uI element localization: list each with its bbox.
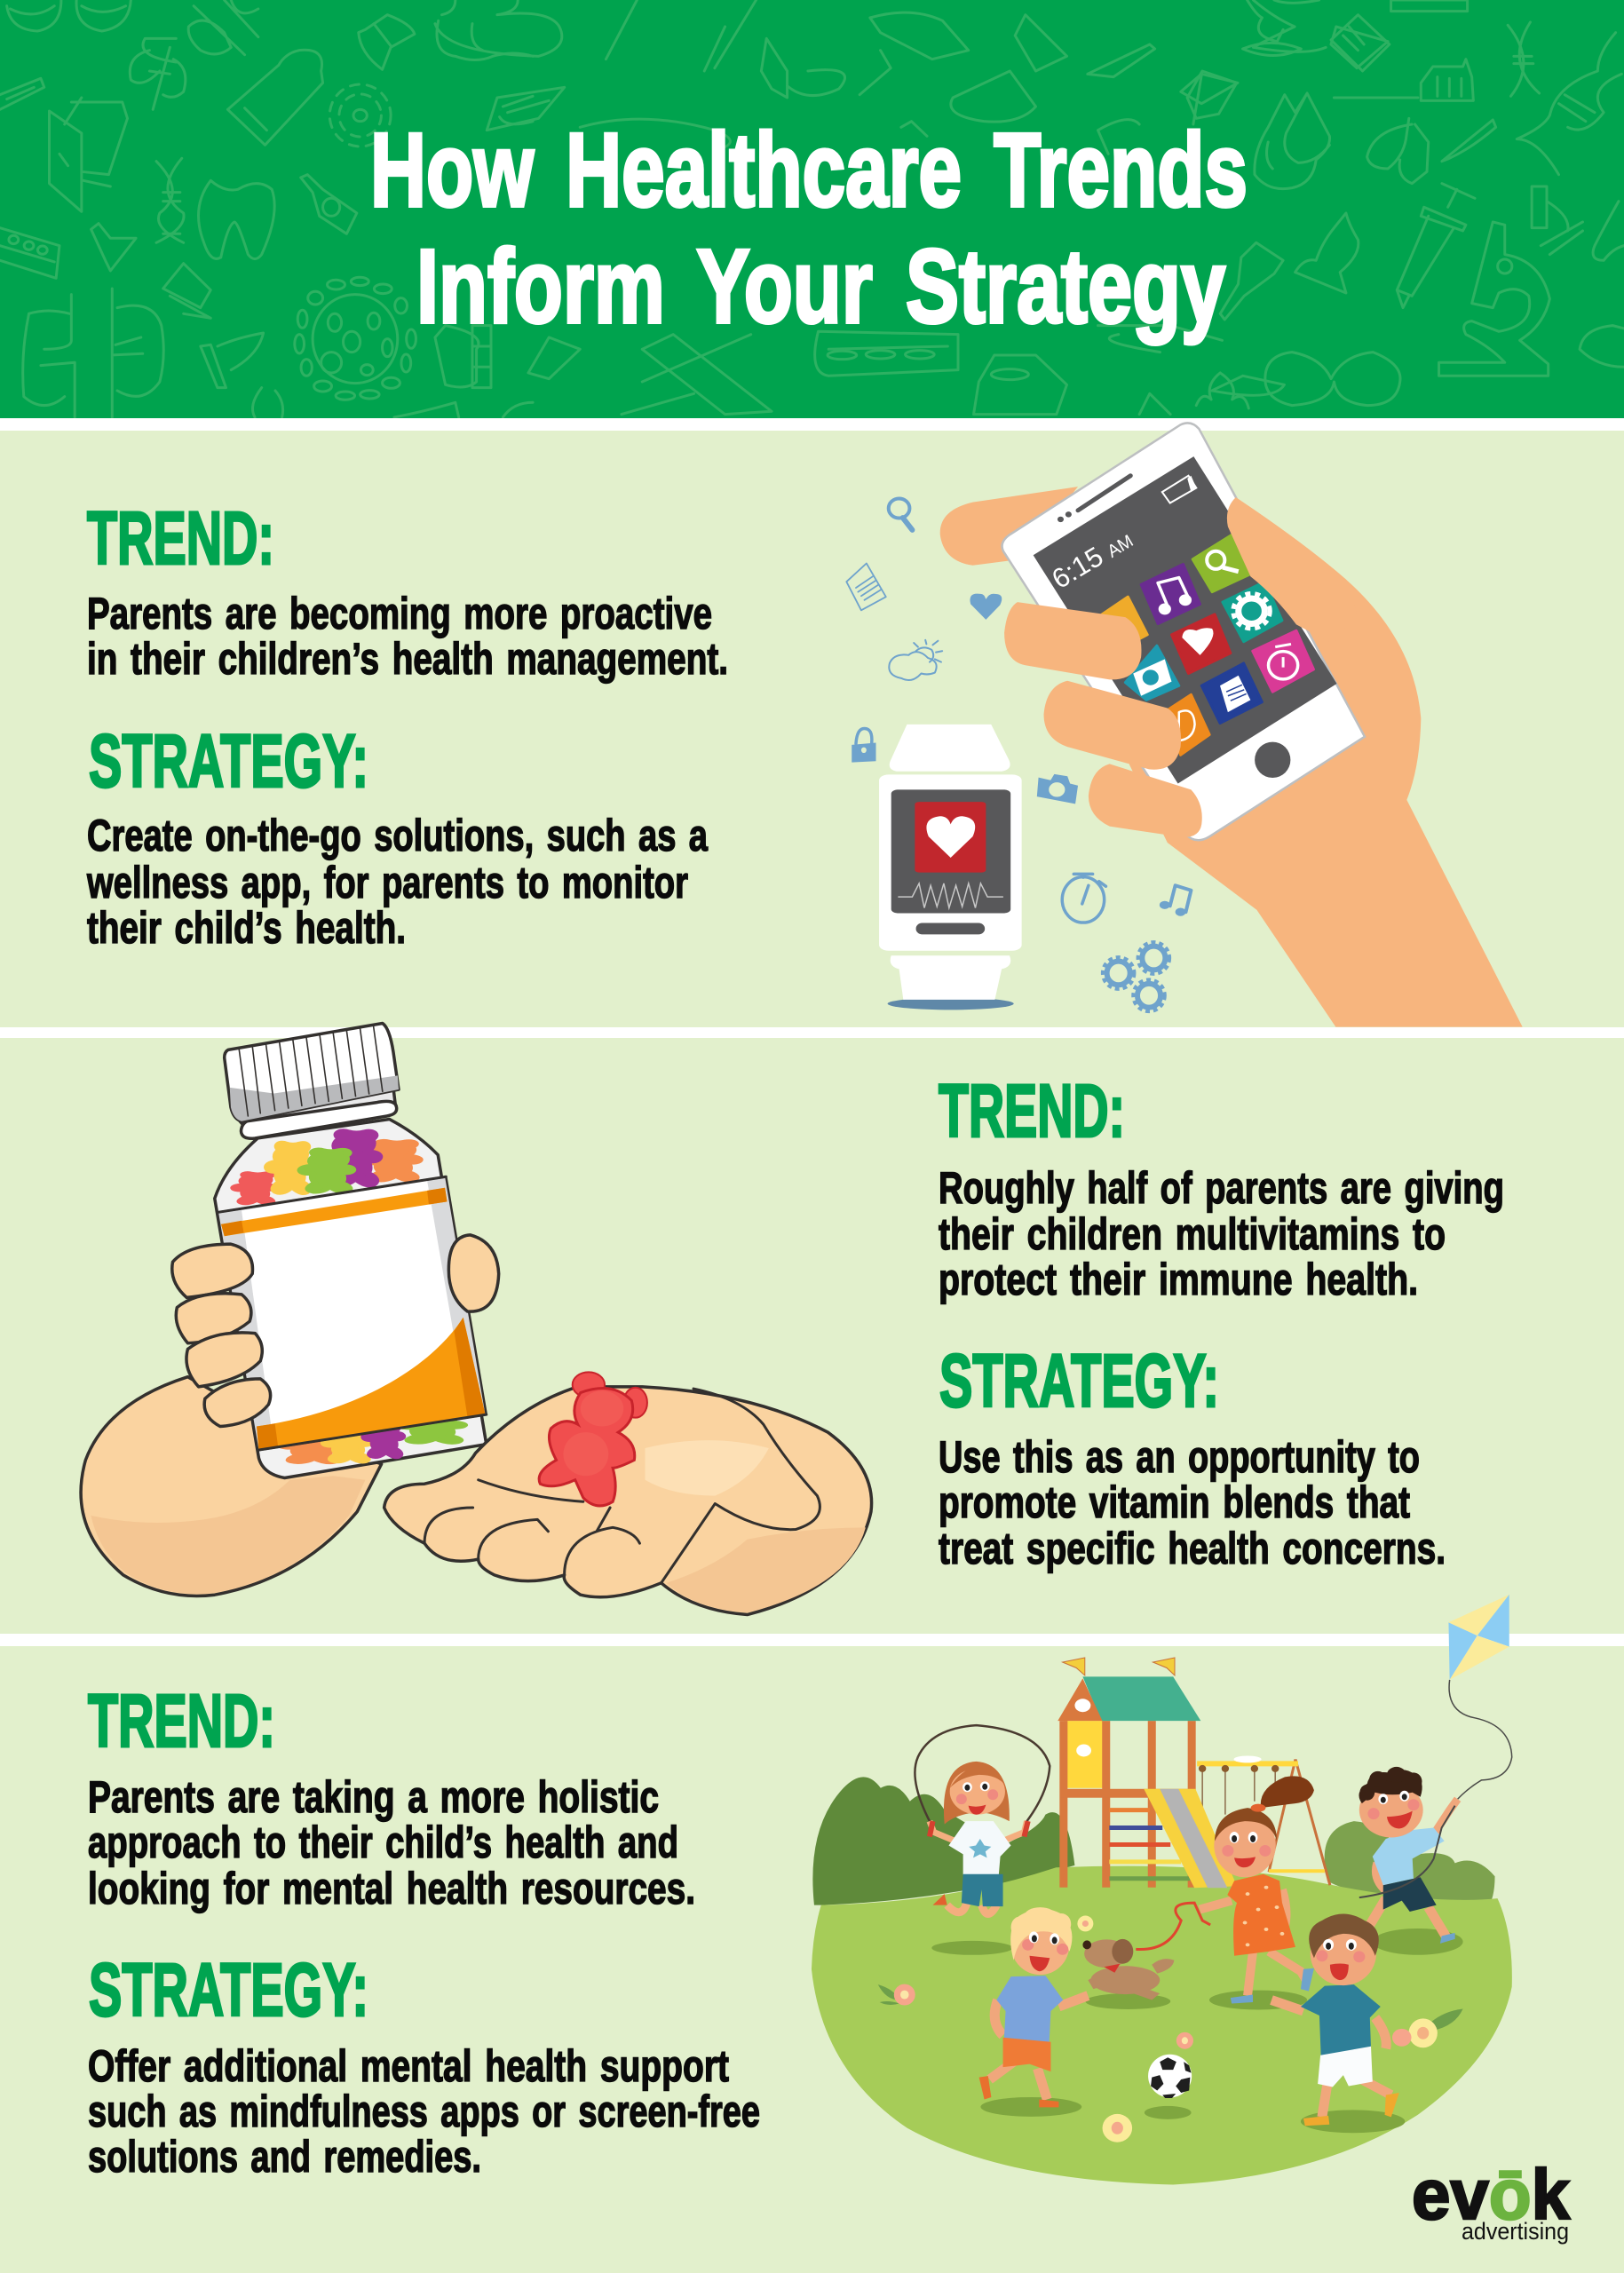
child: blond boy — [979, 1907, 1088, 2107]
floating blue app icons — [846, 498, 1191, 1011]
gummy bears in jar — [233, 1131, 463, 1463]
heading: strategy 2: STRATEGY: — [939, 1339, 1219, 1422]
child: girl in orange dress — [1200, 1776, 1314, 2004]
text: strategy 3 body: Offer additional mental health support — [88, 2041, 729, 2091]
dog with leash — [1082, 1903, 1210, 2000]
slide — [1144, 1789, 1237, 1888]
logo: evok advertising: evōk — [1412, 2155, 1570, 2234]
flowers — [878, 1916, 1463, 2142]
illustration: smartwatch — [879, 725, 1022, 1010]
icon: stopwatch — [1062, 874, 1105, 923]
text: trend 3 body: looking for mental health resources. — [88, 1864, 695, 1913]
panel: trend 3 text — [88, 1679, 760, 2182]
icon: gears — [1103, 942, 1169, 1011]
grass — [812, 1866, 1512, 2184]
panel: trend 1 text — [86, 496, 728, 953]
panel: trend 2 text — [939, 1069, 1504, 1573]
child: girl with jump rope — [915, 1725, 1050, 1914]
text: strategy 2 body: Use this as an opportunity to — [939, 1432, 1420, 1482]
title — [370, 112, 1248, 345]
text: trend 3 body: approach to their child’s health and — [88, 1818, 678, 1867]
header banner — [0, 0, 1624, 418]
text: trend 2 body: protect their immune health. — [939, 1255, 1418, 1304]
text: trend 3 body: Parents are taking a more holistic — [88, 1772, 659, 1822]
heading: strategy 1: STRATEGY: — [89, 719, 368, 803]
phone screen — [1034, 456, 1337, 783]
illustration: vitamin bottle and hands — [81, 1023, 872, 1615]
swing set — [1197, 1755, 1330, 1885]
watch heart — [926, 816, 975, 858]
icon: camera — [1037, 774, 1078, 804]
phone clock text: 6:15 AM — [1047, 523, 1137, 595]
child: boy in teal shirt — [1271, 1914, 1399, 2126]
phone speaker and battery — [1058, 476, 1196, 522]
icon: magnifier — [889, 498, 912, 530]
header pattern: left medical icons — [0, 0, 533, 417]
bottle neck ring — [241, 1101, 397, 1138]
icon: music note — [1160, 885, 1191, 916]
icon: document — [846, 563, 886, 610]
title: How Healthcare Trends — [370, 112, 1248, 229]
thumb over phone — [1227, 497, 1357, 644]
text: strategy 1 body — [86, 811, 709, 953]
home button — [1255, 742, 1290, 778]
text: trend 1 body — [87, 589, 728, 684]
bottle label — [218, 1176, 487, 1450]
text: strategy 3 body — [88, 2041, 760, 2182]
gummy bear on palm — [539, 1372, 647, 1506]
text: strategy 1 body: wellness app, for parents to monitor — [86, 858, 688, 907]
roof — [1082, 1676, 1200, 1721]
text: trend 2 body — [939, 1163, 1504, 1304]
text: strategy 1 body: Create on-the-go solutions, such as a — [87, 811, 709, 860]
text: strategy 1 body: their child’s health. — [87, 903, 406, 953]
text: strategy 3 body: such as mindfulness apps or screen-free — [88, 2087, 760, 2136]
text: trend 1 body: Parents are becoming more proactive — [87, 589, 712, 638]
title: Inform Your Strategy — [416, 228, 1225, 345]
left hand shading — [91, 1476, 365, 1594]
text: strategy 2 body: promote vitamin blends that — [939, 1477, 1410, 1527]
heading: strategy 3: STRATEGY: — [89, 1948, 368, 2031]
right hand — [384, 1387, 872, 1615]
illustration: children playing in a park — [812, 1595, 1512, 2184]
bottle glass — [215, 1120, 487, 1478]
soccer ball — [1148, 2055, 1192, 2098]
bottle neck — [239, 1088, 395, 1129]
bushes — [812, 1777, 1495, 1910]
app icons — [1099, 534, 1313, 755]
text: strategy 2 body: treat specific health concerns. — [939, 1524, 1446, 1573]
text: trend 2 body: their children multivitamins to — [939, 1209, 1446, 1259]
left hand — [81, 1377, 382, 1596]
bottle cap — [225, 1023, 399, 1121]
kite — [1448, 1595, 1512, 1799]
text: strategy 3 body: solutions and remedies. — [88, 2132, 481, 2182]
phone body — [1002, 423, 1365, 840]
text: strategy 2 body — [939, 1432, 1446, 1573]
text: trend 1 body: in their children’s health management. — [87, 634, 728, 684]
heading: trend 3: TREND: — [88, 1679, 275, 1762]
ground shadows — [931, 1928, 1463, 2133]
logo: evok advertising: advertising — [1462, 2218, 1569, 2245]
illustration: hand holding smartphone — [940, 423, 1523, 1027]
text: trend 3 body — [88, 1772, 695, 1913]
heading: trend 1: TREND: — [87, 496, 274, 580]
fingers over phone — [1004, 602, 1202, 837]
header pattern: right medical icons — [1187, 0, 1624, 408]
icon: padlock — [852, 728, 876, 763]
index finger behind phone — [940, 487, 1078, 566]
icon: heart — [970, 594, 1002, 620]
fingers on bottle — [172, 1235, 499, 1426]
child: kite boy — [1359, 1767, 1458, 1944]
header pattern: centre medical icons — [143, 0, 1388, 415]
palm and wrist — [1115, 497, 1523, 1027]
playground tower — [1058, 1658, 1237, 1888]
icon: cloud and sun — [889, 640, 942, 680]
flags — [1063, 1658, 1175, 1675]
vitamin bottle — [215, 1023, 487, 1478]
white section dividers — [0, 418, 1624, 1646]
heading: trend 2: TREND: — [939, 1069, 1125, 1152]
